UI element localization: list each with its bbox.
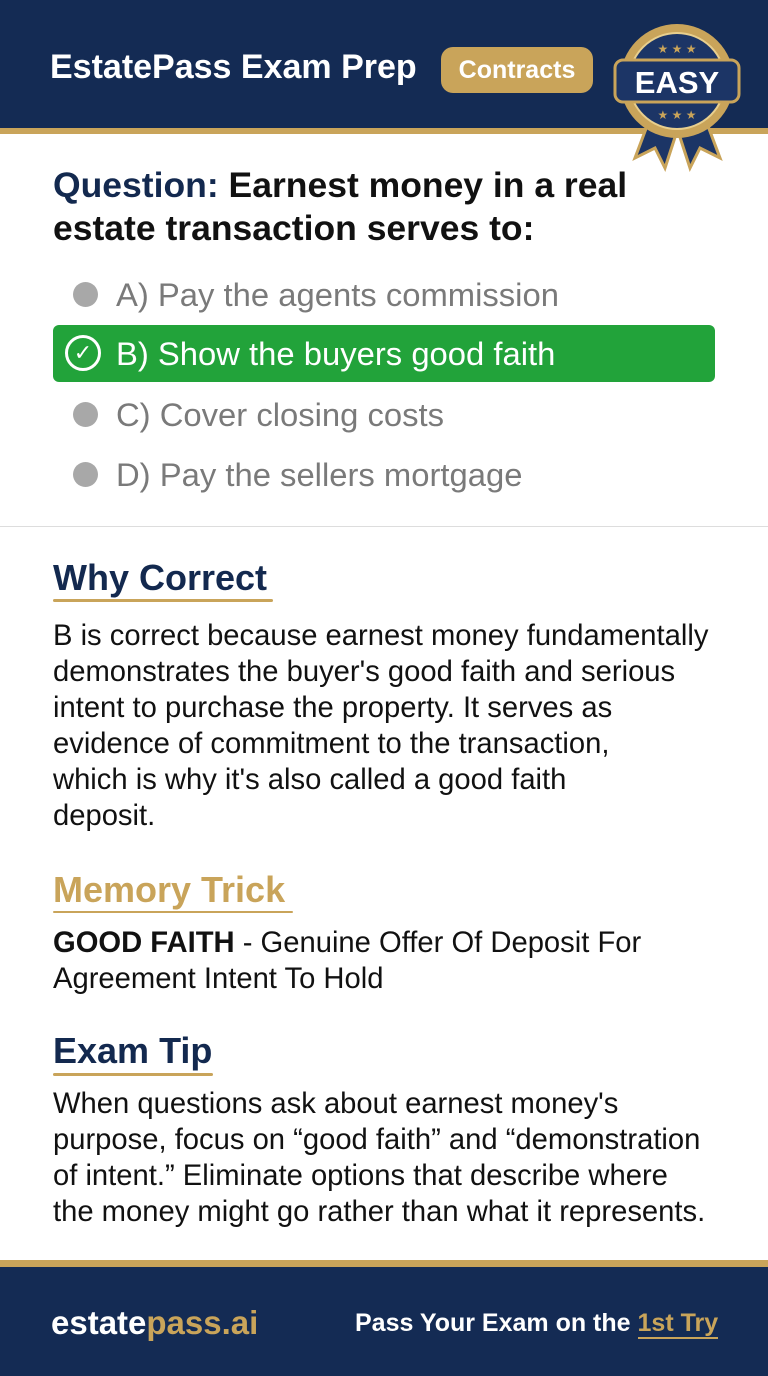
option B correct bbox=[53, 325, 715, 382]
text: memory trick bbox=[53, 927, 641, 995]
option C: C) Cover closing costs bbox=[116, 396, 444, 433]
text: why correct: B is correct because earnest money fundamentally bbox=[53, 620, 708, 652]
text: exam tip bbox=[53, 1088, 705, 1228]
title: EstatePass Exam Prep bbox=[50, 48, 417, 86]
text: exam tip: of intent.” Eliminate options that describe where bbox=[53, 1160, 668, 1192]
question: estate transaction serves to: bbox=[53, 208, 534, 248]
footer logo: estatepass.ai bbox=[51, 1304, 258, 1341]
badge: EASY rosette: EASY bbox=[635, 65, 720, 100]
badge: EASY rosette: ★ ★ ★ bbox=[658, 108, 696, 122]
heading: exam tip: Exam Tip bbox=[53, 1030, 212, 1071]
badge: EASY rosette bbox=[614, 24, 740, 172]
option A: A) Pay the agents commission bbox=[116, 276, 559, 313]
header band bbox=[0, 0, 768, 134]
heading: memory trick: Memory Trick bbox=[53, 869, 285, 910]
heading: why correct: Why Correct bbox=[53, 557, 267, 598]
footer bbox=[0, 1260, 768, 1376]
text: why correct: intent to purchase the property. It serves as bbox=[53, 692, 612, 724]
question bbox=[53, 165, 627, 248]
option B correct: B) Show the buyers good faith bbox=[116, 335, 555, 372]
text: exam tip: purpose, focus on “good faith” and “demonstration bbox=[53, 1124, 700, 1156]
question: Question: Earnest money in a real bbox=[53, 165, 627, 205]
text: memory trick: Agreement Intent To Hold bbox=[53, 963, 383, 995]
category pill: Contracts bbox=[459, 56, 575, 84]
text: exam tip: the money might go rather than what it represents. bbox=[53, 1196, 705, 1228]
option D: D) Pay the sellers mortgage bbox=[116, 456, 522, 493]
badge: EASY rosette: ★ ★ ★ bbox=[658, 42, 696, 56]
text: why correct: deposit. bbox=[53, 800, 155, 832]
category pill bbox=[441, 47, 593, 93]
text: memory trick: GOOD FAITH - Genuine Offer Of Deposit For bbox=[53, 927, 641, 959]
text: exam tip: When questions ask about earnest money's bbox=[53, 1088, 618, 1120]
text: why correct: evidence of commitment to the transaction, bbox=[53, 728, 609, 760]
text: why correct bbox=[53, 620, 708, 832]
text: why correct: demonstrates the buyer's good faith and serious bbox=[53, 656, 675, 688]
text: why correct: which is why it's also called a good faith bbox=[53, 764, 566, 796]
option B correct: ✓ bbox=[74, 340, 92, 365]
footer tagline: Pass Your Exam on the 1st Try bbox=[355, 1309, 718, 1337]
